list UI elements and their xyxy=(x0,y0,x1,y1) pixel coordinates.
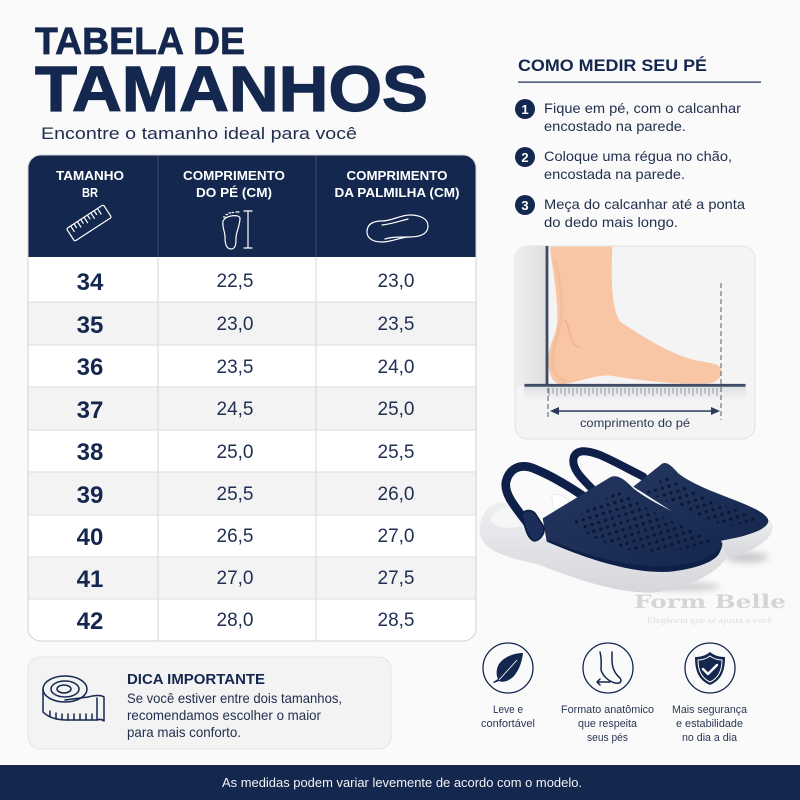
diagram label: comprimento do pé xyxy=(580,416,690,430)
tip text: para mais conforto. xyxy=(127,724,241,740)
table rows: 25,0 xyxy=(217,442,253,463)
step 2: 2 xyxy=(521,150,529,165)
table rows: 25,0 xyxy=(378,399,414,420)
shoe shadows xyxy=(647,552,768,591)
title: TAMANHOS xyxy=(35,53,428,125)
step 3: do dedo mais longo. xyxy=(544,214,678,230)
benefit: light and comfortable xyxy=(481,643,535,730)
caption xyxy=(561,704,654,744)
table rows: 26,0 xyxy=(378,484,414,505)
table rows: 25,5 xyxy=(217,484,253,505)
benefit: safety and stability xyxy=(672,643,748,744)
watermark: Form Belle xyxy=(634,591,786,613)
caption: no dia a dia xyxy=(682,732,738,744)
table header: insole column: COMPRIMENTO xyxy=(346,169,448,183)
tip text: DICA IMPORTANTE xyxy=(127,672,265,688)
table rows: 23,5 xyxy=(378,314,414,335)
back clog xyxy=(552,451,773,557)
steps list xyxy=(515,99,745,230)
table rows: 24,0 xyxy=(378,357,414,378)
step 3 xyxy=(515,195,745,230)
table header: foot length column: COMPRIMENTO xyxy=(183,169,285,183)
panel: foot measuring diagram xyxy=(515,246,755,439)
caption: Mais segurança xyxy=(672,704,748,716)
footer: As medidas podem variar levemente de acordo com o modelo. xyxy=(222,775,582,790)
table rows: 39 xyxy=(77,482,103,509)
subtitle: Encontre o tamanho ideal para você xyxy=(41,124,357,143)
table rows: 24,5 xyxy=(217,399,253,420)
table rows: 27,5 xyxy=(378,568,414,589)
tip text: recomendamos escolher o maior xyxy=(127,707,321,723)
step 3: 3 xyxy=(521,198,529,213)
table rows: 38 xyxy=(77,439,103,466)
caption: Formato anatômico xyxy=(561,704,654,716)
table header: size column xyxy=(56,169,124,241)
table header: foot length column: DO PÉ (CM) xyxy=(196,185,272,200)
table header: size column: TAMANHO xyxy=(56,169,124,183)
heading: how to measure: COMO MEDIR SEU PÉ xyxy=(518,56,707,75)
table rows: 40 xyxy=(77,524,103,551)
panel: tip xyxy=(28,657,391,749)
table rows: 28,0 xyxy=(217,610,253,631)
step 1: encostado na parede. xyxy=(544,118,686,134)
table rows: 22,5 xyxy=(217,271,253,292)
title xyxy=(35,21,428,125)
dashed guides xyxy=(548,283,721,420)
table rows: 37 xyxy=(77,397,103,424)
arrow: foot length xyxy=(550,407,720,415)
caption xyxy=(672,704,748,744)
table rows: 34 xyxy=(77,269,104,296)
foot illustration xyxy=(548,247,721,384)
front clog xyxy=(479,466,727,593)
table rows: 35 xyxy=(77,312,103,339)
step 1: Fique em pé, com o calcanhar xyxy=(544,100,741,116)
footer xyxy=(0,765,800,800)
product: navy clogs xyxy=(479,451,773,593)
table header: insole column: DA PALMILHA (CM) xyxy=(334,186,460,200)
table rows: 23,5 xyxy=(217,357,253,378)
table header: foot length column xyxy=(183,169,285,249)
table rows: 42 xyxy=(77,608,103,635)
step 1 xyxy=(515,99,741,134)
table rows xyxy=(77,269,414,635)
caption: e estabilidade xyxy=(676,718,743,730)
title: TABELA DE xyxy=(35,21,245,63)
table header: insole column xyxy=(334,169,460,242)
table header: size column: BR xyxy=(82,186,98,200)
caption: seus pés xyxy=(587,732,628,744)
step 1: 1 xyxy=(521,102,529,117)
tip text xyxy=(127,672,342,740)
table rows: 23,0 xyxy=(378,271,414,292)
icon: shield xyxy=(685,643,735,693)
step 3: Meça do calcanhar até a ponta xyxy=(544,196,745,212)
wall and floor lines xyxy=(524,246,746,385)
watermark: Elegância que se ajusta a você xyxy=(647,615,772,625)
table rows: 25,5 xyxy=(378,442,414,463)
table rows: 27,0 xyxy=(217,568,253,589)
table rows: 26,5 xyxy=(217,526,253,547)
table rows: 41 xyxy=(77,566,103,593)
caption: confortável xyxy=(481,718,535,730)
table rows: 28,5 xyxy=(378,610,414,631)
watermark xyxy=(634,591,786,625)
caption xyxy=(481,704,535,730)
table rows: 23,0 xyxy=(217,314,253,335)
ruler ticks xyxy=(549,388,717,396)
benefit: anatomic shape xyxy=(561,643,654,744)
icon: tape measure xyxy=(43,676,104,721)
step 2: encostada na parede. xyxy=(544,166,685,182)
table rows: 36 xyxy=(77,354,103,381)
step 2 xyxy=(515,147,732,182)
caption: que respeita xyxy=(578,718,638,730)
tip text: Se você estiver entre dois tamanhos, xyxy=(127,690,342,706)
step 2: Coloque uma régua no chão, xyxy=(544,148,732,164)
size table xyxy=(28,155,476,641)
icon: foot xyxy=(583,643,633,693)
icon: feather xyxy=(483,643,533,693)
caption: Leve e xyxy=(493,704,523,716)
table rows: 27,0 xyxy=(378,526,414,547)
